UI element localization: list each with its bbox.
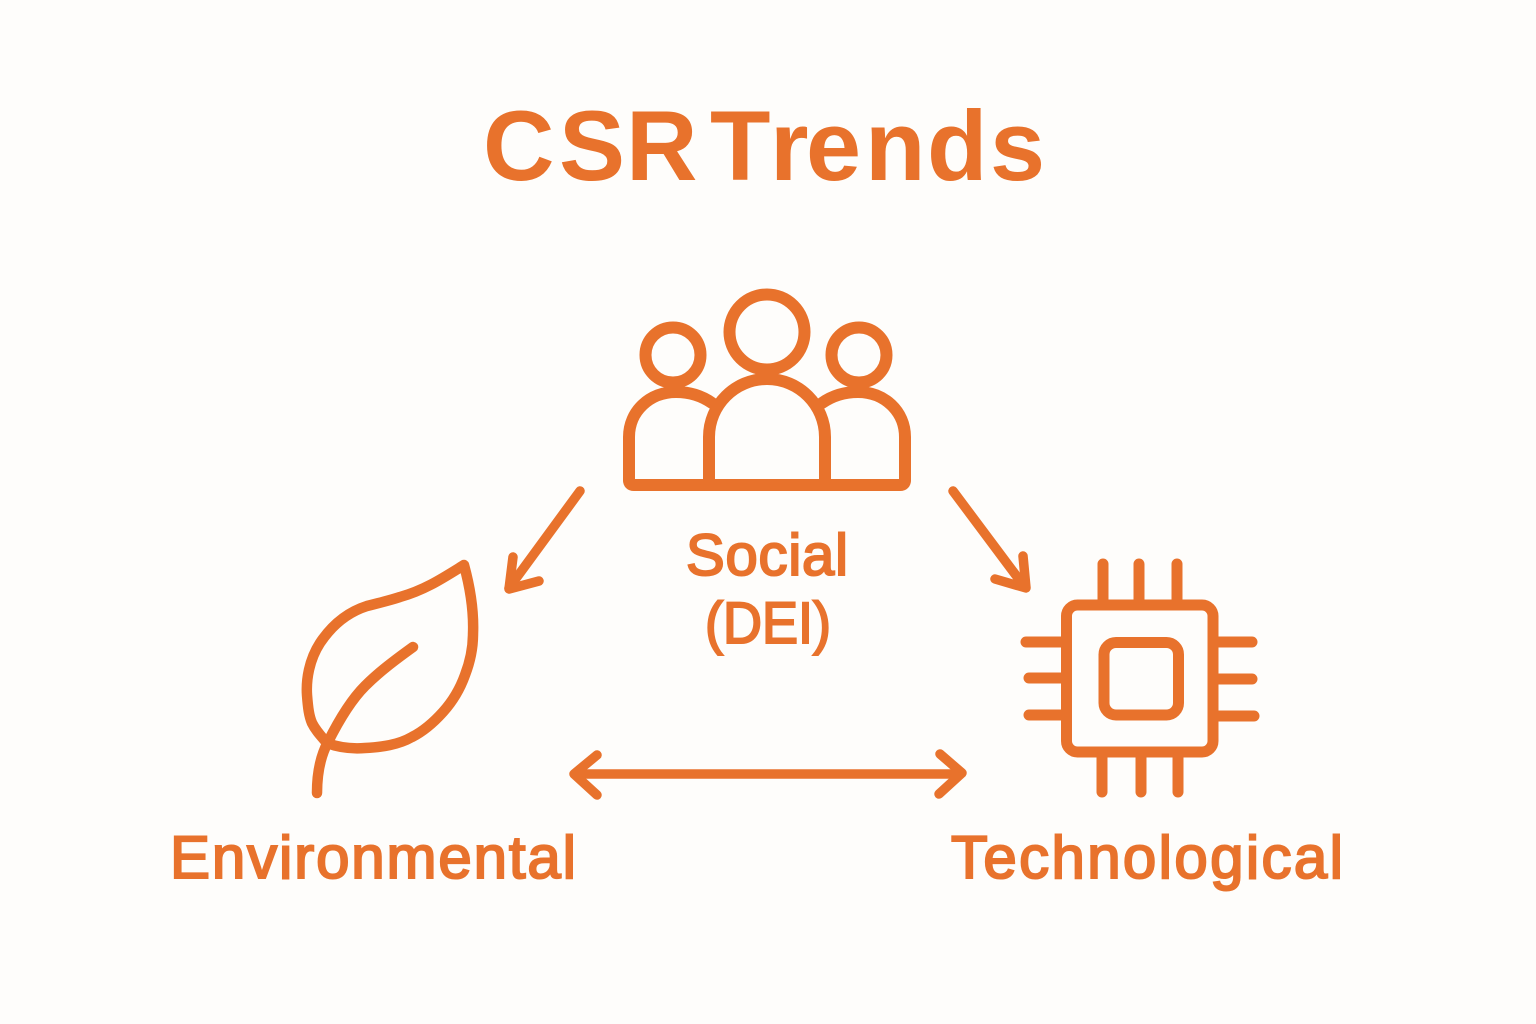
icon: people group — [629, 294, 905, 485]
arrow: social to technological — [953, 491, 1026, 588]
DEI label: (DEI) — [705, 591, 831, 656]
title: CSR Trends — [483, 90, 1045, 201]
arrow: double headed — [574, 754, 962, 795]
icon: microchip — [1026, 564, 1254, 792]
icon: leaf — [307, 565, 473, 793]
social label: Social — [686, 523, 848, 588]
arrow: social to environmental — [509, 491, 580, 589]
technological label: Technological — [951, 824, 1343, 891]
environmental label: Environmental — [170, 824, 576, 891]
